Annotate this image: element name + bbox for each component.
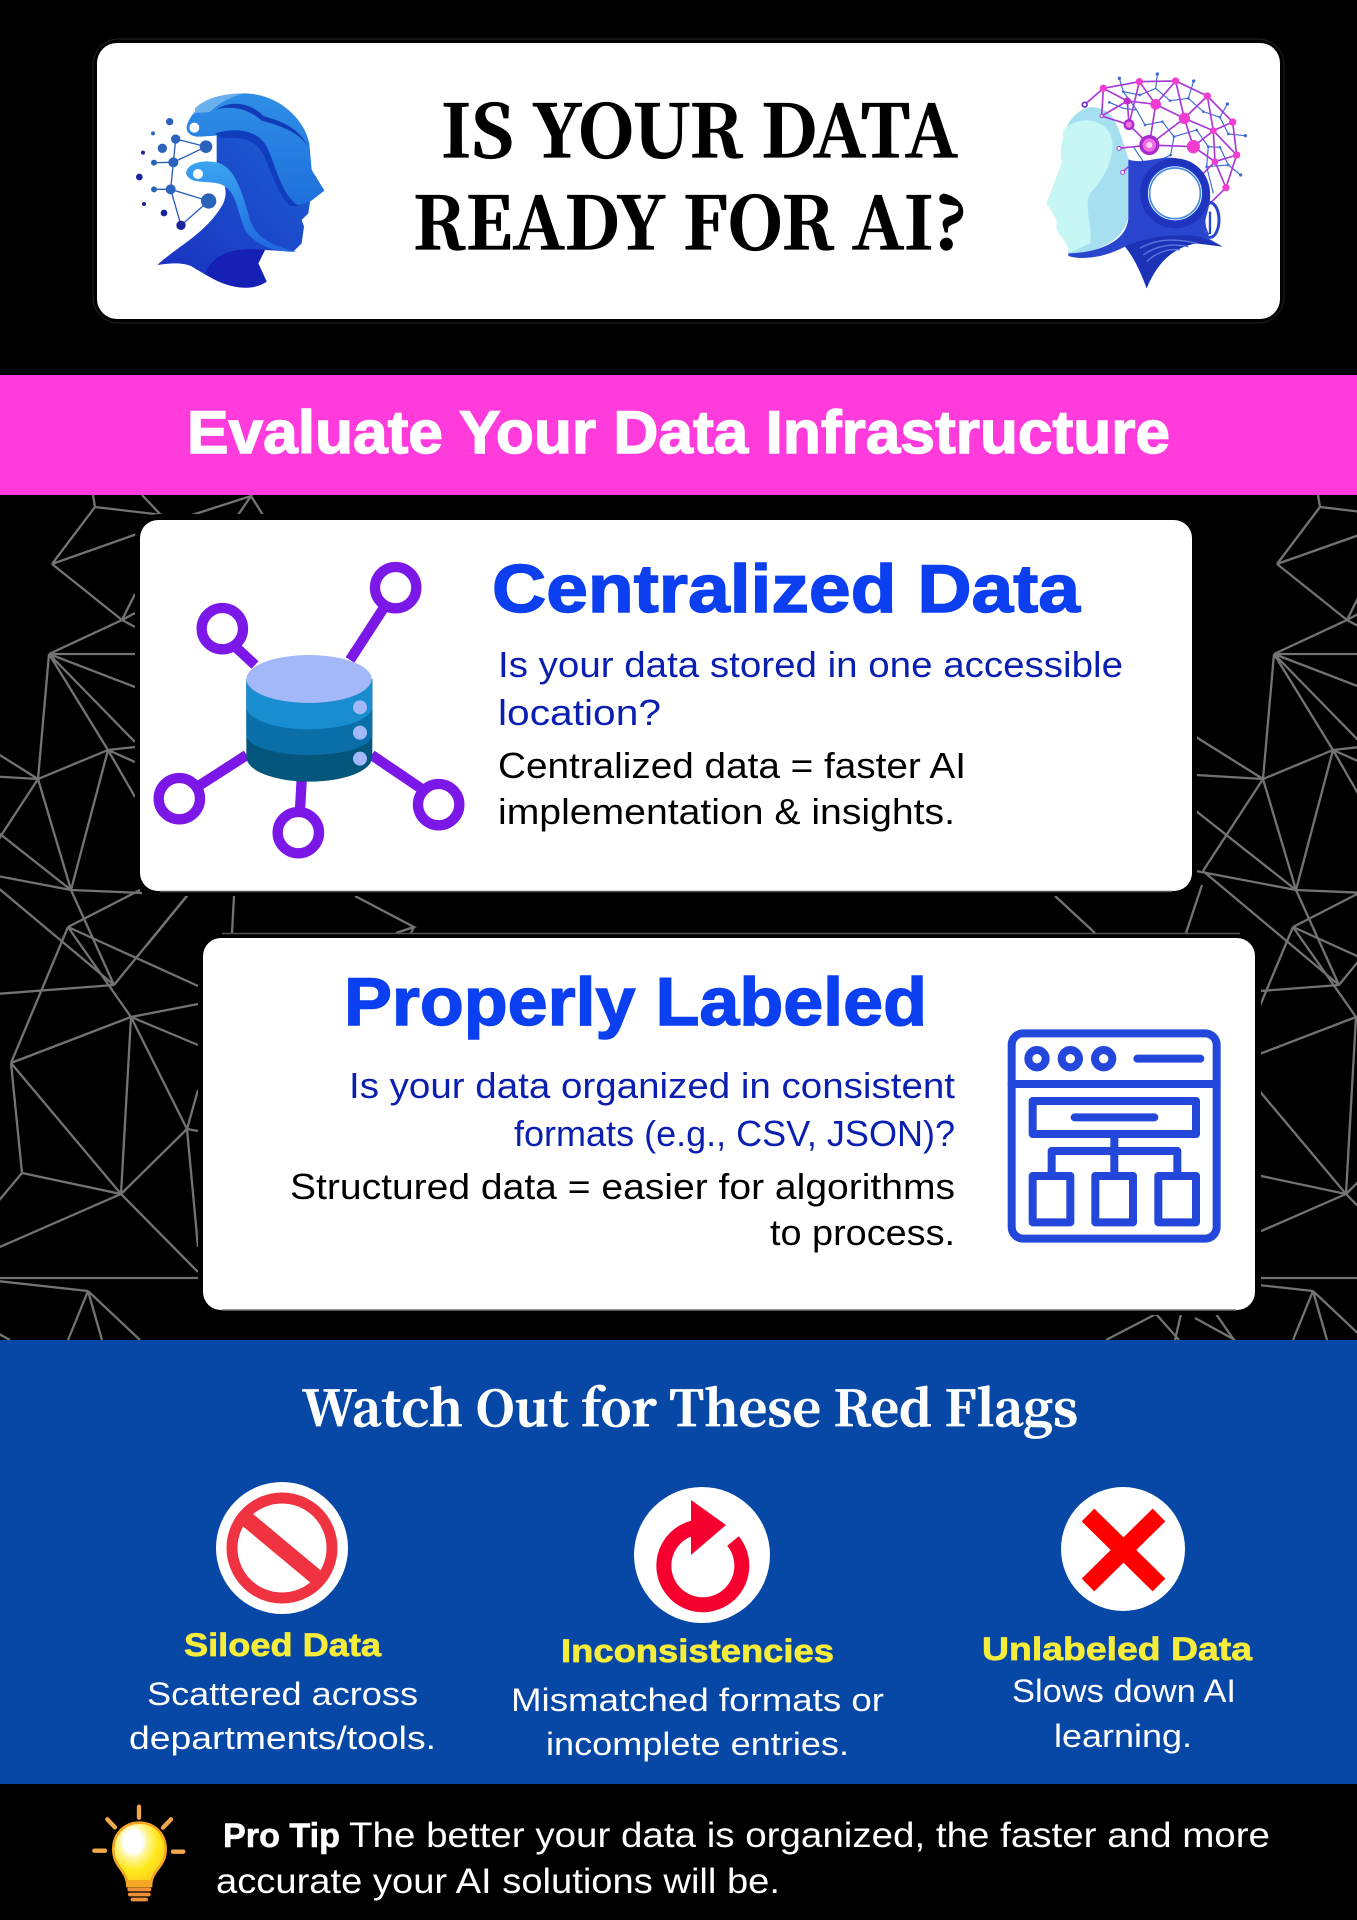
header card (93, 39, 1284, 323)
title: READY FOR AI? (413, 166, 967, 270)
siloed data: Scattered across (147, 1676, 418, 1712)
question text (498, 644, 1123, 733)
siloed data: Siloed Data (184, 1627, 381, 1663)
question text: Is your data organized in consistent (349, 1065, 955, 1106)
unlabeled data: Slows down AI (1012, 1673, 1236, 1709)
panel: centralized data (135, 514, 1197, 896)
pro tip text: Pro Tip (223, 1817, 340, 1855)
inconsistencies (511, 1633, 884, 1762)
question text: location? (498, 692, 661, 733)
benefit text: Centralized data = faster AI (498, 745, 966, 786)
panel: properly labeled (198, 933, 1261, 1315)
heading: properly labeled: Properly Labeled (344, 964, 927, 1040)
title: IS YOUR DATA (441, 74, 958, 178)
icon: database with connected nodes (159, 567, 459, 853)
benefit text (498, 745, 966, 832)
inconsistencies: incomplete entries. (546, 1726, 849, 1762)
icon: blue human head with network (136, 93, 324, 288)
icon: red x mark (1061, 1487, 1185, 1611)
siloed data (129, 1627, 436, 1756)
icon: structured data window (1012, 1033, 1217, 1239)
pro tip text (216, 1816, 1270, 1901)
benefit text: implementation & insights. (498, 791, 955, 832)
title (413, 74, 967, 270)
pro tip text: accurate your AI solutions will be. (216, 1862, 780, 1901)
unlabeled data: Unlabeled Data (982, 1631, 1252, 1667)
inconsistencies: Inconsistencies (561, 1633, 834, 1669)
question text: formats (e.g., CSV, JSON)? (514, 1113, 955, 1154)
siloed data: departments/tools. (129, 1720, 436, 1756)
icon: circular arrow (634, 1487, 770, 1623)
heading: watch out for these red flags: Watch Out for These Red Flags (302, 1371, 1078, 1441)
benefit text (290, 1166, 955, 1253)
network line background pattern (0, 495, 1357, 1340)
inconsistencies: Mismatched formats or (511, 1682, 884, 1718)
unlabeled data: learning. (1054, 1718, 1192, 1754)
icon: prohibited sign (216, 1482, 348, 1614)
icon: robot head with magenta neural network (1047, 72, 1247, 288)
question text: Is your data stored in one accessible (498, 644, 1123, 685)
unlabeled data (982, 1631, 1252, 1754)
benefit text: to process. (770, 1212, 955, 1253)
icon: light bulb (94, 1807, 183, 1901)
question text (349, 1065, 955, 1154)
banner: evaluate your data infrastructure (0, 375, 1357, 495)
banner: evaluate your data infrastructure: Evaluate Your Data Infrastructure (187, 399, 1170, 466)
benefit text: Structured data = easier for algorithms (290, 1166, 955, 1207)
pro tip text: The better your data is organized, the faster and more (349, 1816, 1270, 1855)
panel: red flags (0, 1340, 1357, 1784)
heading: centralized data: Centralized Data (492, 551, 1081, 627)
